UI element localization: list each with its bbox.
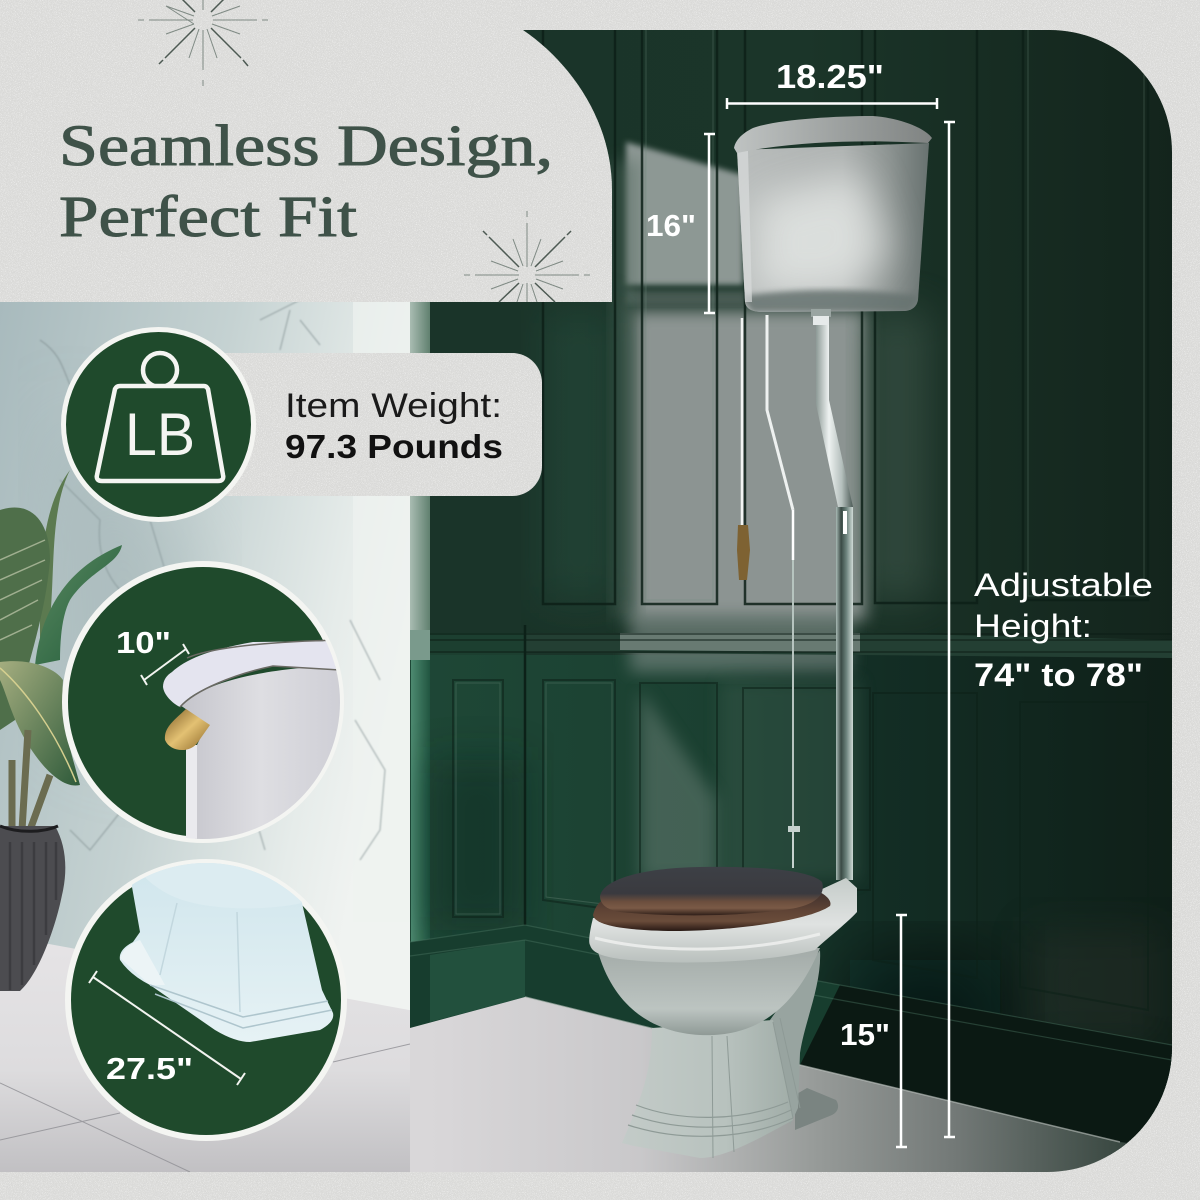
room corner: [524, 625, 526, 997]
marble wall: [0, 300, 420, 1030]
detail circle: 10 inch tank rim: [65, 564, 341, 845]
heading: Seamless Design, Perfect Fit: Perfect Fit: [59, 184, 357, 249]
detail circle: 27.5 inch base: [68, 855, 344, 1138]
27.5 inch dimension line: [89, 971, 245, 1085]
dimension: tank height 16: [646, 134, 715, 313]
strips at wall edge: [410, 302, 430, 632]
weight pill: [150, 353, 542, 496]
heading: Seamless Design, Perfect Fit: Seamless Design,: [59, 113, 553, 178]
dimension: seat height 15: [840, 915, 907, 1147]
adjustable height text: Adjustable: [974, 567, 1153, 603]
green panelled wall: [408, 20, 1180, 1180]
icon: LB weight: LB: [125, 401, 195, 468]
chair rail: [430, 635, 524, 655]
pull rod: [767, 315, 793, 830]
pull chain and handle: [737, 318, 750, 580]
10 inch dimension line: [141, 644, 189, 685]
heading: Seamless Design, Perfect Fit: [59, 113, 553, 249]
dimension: width 18.25: [727, 58, 937, 109]
cream title panel: [0, 0, 1200, 302]
light patches on wall: [430, 142, 1160, 1090]
floor of room: [410, 997, 1127, 1172]
floor tile lines: [0, 1044, 410, 1172]
baseboard: [410, 925, 1172, 1150]
adjustable height text: 74" to 78": [974, 657, 1143, 693]
weight label: Item Weight:: [285, 387, 502, 425]
rod valve: [788, 826, 800, 868]
dimension: width 18.25: 18.25": [776, 58, 884, 95]
plant: [0, 470, 122, 830]
10 inch label: 10": [116, 625, 171, 660]
dimension: overall height line: [944, 122, 955, 1137]
title panel texture: [0, 0, 1200, 302]
lower wall: [410, 655, 1180, 1155]
dimension: seat height 15: 15": [840, 1017, 890, 1052]
weight value: 97.3 Pounds: [285, 428, 503, 465]
dimension: tank height 16: 16": [646, 208, 696, 243]
floor: [0, 935, 420, 1180]
wooden seat and lid: [593, 867, 830, 931]
flush pipe: [811, 309, 853, 880]
wall panels: [543, 25, 1148, 604]
27.5 inch label: 27.5": [106, 1051, 193, 1086]
toilet bowl: [589, 878, 857, 1158]
decorative starburst: top: [138, 0, 268, 86]
pot: [0, 826, 65, 991]
decorative starburst: bottom: [464, 211, 590, 302]
tall toilet tank: [734, 116, 932, 312]
adjustable height text: Height:: [974, 608, 1092, 644]
upper wall: [430, 20, 1180, 660]
icon: LB weight: [64, 330, 254, 520]
adjustable height text: [974, 567, 1153, 693]
